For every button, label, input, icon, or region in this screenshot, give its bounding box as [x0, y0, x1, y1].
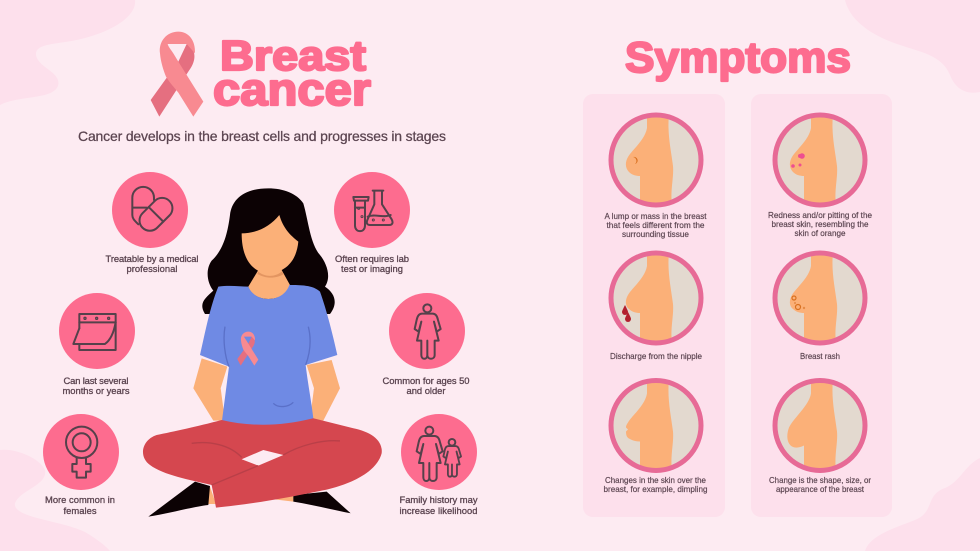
- panel: symptoms column 2: [751, 94, 892, 517]
- background blob: bottom left: [0, 450, 110, 551]
- label: treatable: Treatable by a medical: [106, 253, 198, 264]
- icon: calendar: [59, 293, 135, 369]
- symptom: lump: [604, 114, 707, 239]
- symptom: skin changes: breast, for example, dimpling: [604, 484, 708, 494]
- symptom: lump: that feels different from the: [606, 220, 705, 230]
- icon: woman: [389, 293, 465, 369]
- symptom: rash: [775, 252, 865, 361]
- label: family history: [400, 494, 478, 516]
- label: lab test: Often requires lab: [335, 253, 409, 264]
- background blob: top right: [845, 0, 980, 93]
- label: duration: months or years: [62, 385, 130, 396]
- label: family history: increase likelihood: [400, 505, 478, 516]
- symptom: shape change: Change is the shape, size, or: [769, 475, 871, 485]
- label: duration: [62, 375, 130, 396]
- title: Breast cancer: cancer: [213, 64, 371, 115]
- label: treatable: professional: [126, 263, 178, 274]
- illustration: seated woman: [143, 188, 382, 517]
- symptom: skin changes: [604, 380, 708, 494]
- icon: family: [401, 414, 477, 490]
- label: lab test: [335, 253, 409, 274]
- panel: symptoms column 1: [583, 94, 725, 517]
- background blob: top left: [0, 0, 135, 105]
- symptom: redness: breast skin, resembling the: [772, 219, 869, 229]
- label: age: Common for ages 50: [382, 375, 470, 386]
- background blob: bottom right: [865, 458, 980, 551]
- symptom: lump: surrounding tissue: [622, 229, 689, 239]
- symptom: redness: [768, 114, 872, 238]
- symptom: skin changes: Changes in the skin over the: [605, 475, 706, 485]
- label: treatable: [106, 253, 198, 274]
- label: duration: Can last several: [64, 375, 128, 386]
- symptom: shape change: appearance of the breast: [776, 484, 865, 494]
- label: age: [382, 375, 470, 396]
- symptom: shape change: [769, 380, 871, 494]
- symptom: lump: A lump or mass in the breast: [604, 211, 707, 221]
- icon: lab flask and tube: [334, 172, 410, 248]
- label: females: More common in: [45, 494, 115, 505]
- icon: pink ribbon: [151, 32, 203, 117]
- heading: Symptoms: Symptoms: [625, 34, 851, 82]
- label: age: and older: [406, 385, 446, 396]
- title: Breast cancer: Breast: [220, 32, 366, 79]
- symptom: rash: Breast rash: [800, 351, 840, 361]
- label: family history: Family history may: [400, 494, 478, 505]
- symptom: redness: Redness and/or pitting of the: [768, 210, 872, 220]
- icon: female symbol: [43, 414, 119, 490]
- symptom: redness: skin of orange: [794, 228, 846, 238]
- subtitle: Cancer develops in the breast cells and progresses in stages: [78, 128, 446, 144]
- label: females: females: [64, 505, 97, 516]
- title: Breast cancer: [213, 32, 371, 115]
- symptom: discharge: Discharge from the nipple: [610, 351, 702, 361]
- symptom: discharge: [610, 252, 702, 361]
- icon: pills: [112, 172, 188, 248]
- label: females: [45, 494, 115, 516]
- label: lab test: test or imaging: [341, 263, 403, 274]
